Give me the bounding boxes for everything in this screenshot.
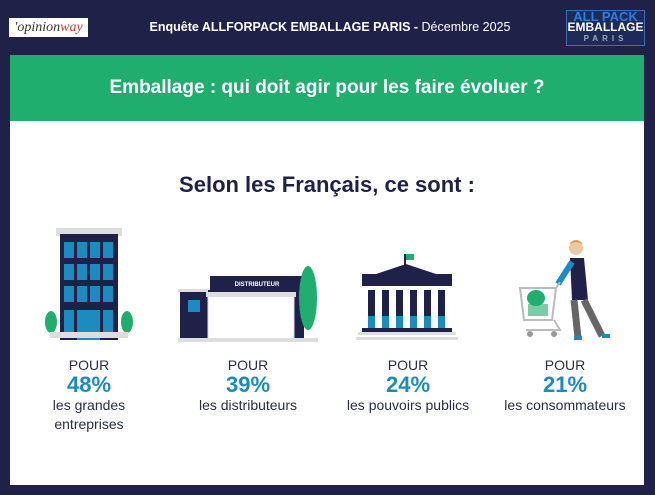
green title band [10, 55, 644, 121]
icon: store [178, 266, 318, 342]
icon: store: DISTRIBUTEUR [235, 282, 280, 288]
stat: consommateurs: POUR [545, 357, 585, 373]
stat: consommateurs: 21% [543, 372, 587, 397]
icon: shopper with cart [518, 240, 610, 340]
stat: pouvoirs publics [347, 357, 469, 413]
logo: allforpack: PARIS [584, 34, 627, 43]
stat: pouvoirs publics: POUR [388, 357, 428, 373]
stat: distributeurs: les distributeurs [199, 397, 297, 413]
header text: Enquête ALLFORPACK EMBALLAGE PARIS - Décembre 2025 [150, 20, 510, 34]
stat: pouvoirs publics: 24% [386, 372, 430, 397]
stat: grandes entreprises: POUR [69, 357, 109, 373]
stat: pouvoirs publics: les pouvoirs publics [347, 397, 469, 413]
logo: allforpack: EMBALLAGE [568, 20, 644, 34]
icon: office building [45, 228, 133, 340]
stat: consommateurs: les consommateurs [504, 397, 626, 413]
stat: grandes entreprises: entreprises [54, 416, 124, 432]
subtitle: Selon les Français, ce sont : [179, 172, 475, 197]
logo: opinionway: 'opinionway [14, 20, 83, 35]
stat: distributeurs: 39% [226, 372, 270, 397]
stat: consommateurs [504, 357, 626, 413]
logo: opinionway [9, 18, 88, 37]
green title band: Emballage : qui doit agir pour les faire évoluer ? [110, 77, 544, 98]
stat: distributeurs: POUR [228, 357, 268, 373]
stat: grandes entreprises: les grandes [53, 397, 125, 413]
icon: government building [356, 254, 458, 340]
stat: grandes entreprises [53, 357, 125, 432]
logo: allforpack [566, 10, 645, 46]
logo: allforpack: ALL PACK [573, 9, 638, 24]
stat: distributeurs [199, 357, 297, 413]
stat: grandes entreprises: 48% [67, 372, 111, 397]
